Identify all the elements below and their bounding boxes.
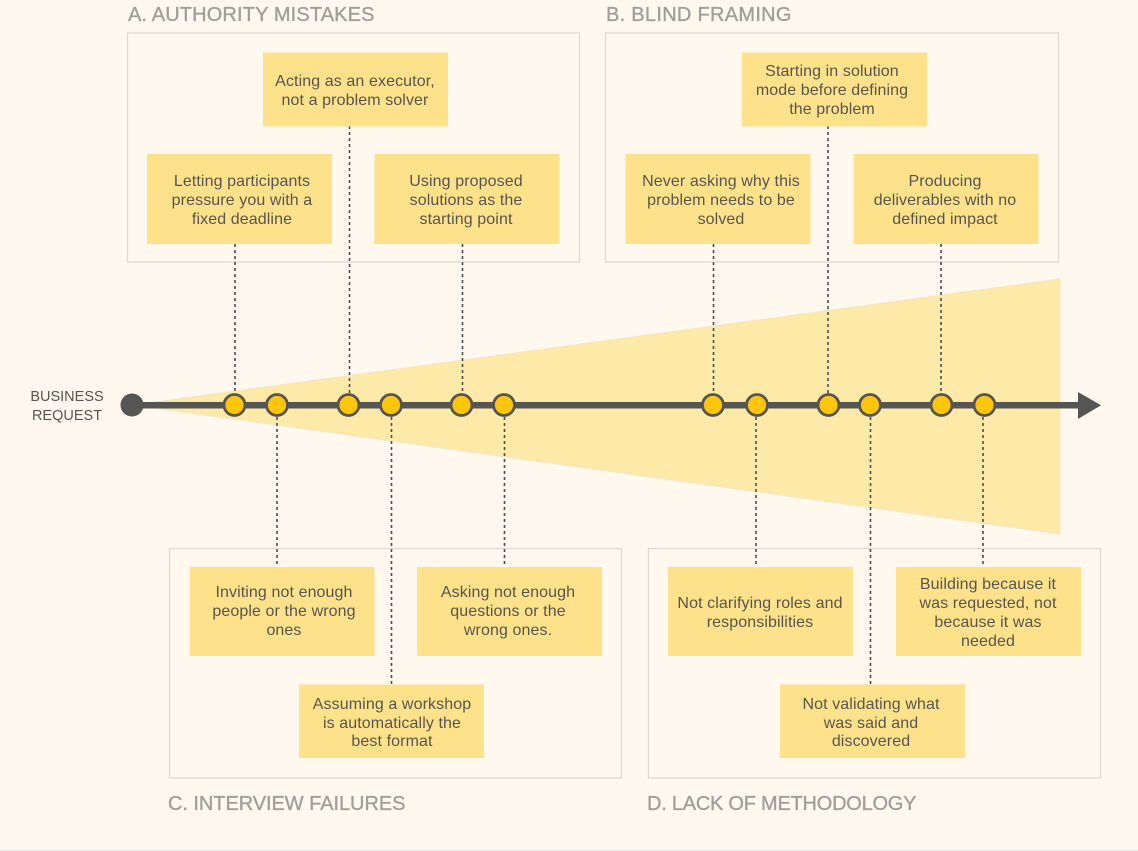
note: using proposed solutions: starting point (419, 211, 513, 228)
note: inviting not enough: people or the wrong (212, 603, 356, 620)
note: assuming a workshop: best format (351, 733, 433, 750)
note: not clarifying roles (668, 567, 853, 656)
heading: B: B. BLIND FRAMING (606, 4, 792, 26)
connectors (235, 126, 983, 685)
heading: D: D. LACK OF METHODOLOGY (647, 793, 917, 815)
note: asking not enough: Asking not enough (441, 584, 575, 601)
panel: authority mistakes (128, 33, 580, 262)
note: building because requested: needed (961, 633, 1015, 650)
note: letting participants: fixed deadline (192, 211, 292, 228)
note: not validating (780, 684, 965, 758)
panel: lack of methodology (648, 548, 1100, 778)
note: producing deliverables (854, 154, 1038, 244)
note: using proposed solutions: Using proposed (409, 173, 523, 190)
note: never asking why (626, 154, 810, 244)
note: never asking why: problem needs to be (647, 192, 795, 209)
note: building because requested (896, 567, 1081, 656)
timeline arrow (132, 392, 1101, 419)
note: building because requested: because it was (934, 614, 1042, 631)
panel: interview failures (170, 548, 622, 778)
note: producing deliverables: deliverables with no (874, 192, 1016, 209)
note: building because requested: was requested, not (918, 595, 1057, 612)
note: starting in solution mode: the problem (789, 101, 875, 118)
start node (120, 394, 144, 416)
note: producing deliverables: Producing (909, 173, 981, 190)
label: business request: BUSINESS (30, 389, 104, 405)
note: not clarifying roles: responsibilities (707, 614, 813, 631)
note: assuming a workshop: Assuming a workshop (313, 696, 471, 713)
note: acting as an executor: not a problem solver (282, 92, 429, 109)
note: not validating: Not validating what (802, 696, 940, 713)
note: using proposed solutions (374, 154, 560, 244)
note: starting in solution mode (742, 52, 927, 126)
note: never asking why: Never asking why this (642, 173, 800, 190)
note: starting in solution mode: mode before defining (756, 82, 908, 99)
note: producing deliverables: defined impact (892, 211, 998, 228)
note: not validating: was said and (823, 715, 918, 732)
label: business request: REQUEST (32, 408, 102, 424)
note: not clarifying roles: Not clarifying roles and (677, 595, 843, 612)
note: letting participants: pressure you with a (172, 192, 312, 209)
note: using proposed solutions: solutions as the (410, 192, 522, 209)
note: building because requested: Building because it (920, 576, 1057, 593)
note: acting as an executor (263, 52, 448, 126)
panel: blind framing (606, 33, 1058, 262)
widening cone (133, 279, 1060, 534)
heading: A: A. AUTHORITY MISTAKES (128, 4, 375, 26)
timeline nodes (224, 394, 995, 416)
note: asking not enough (417, 567, 602, 656)
heading: C: C. INTERVIEW FAILURES (168, 793, 406, 815)
note: inviting not enough: Inviting not enough (215, 584, 353, 601)
note: asking not enough: wrong ones. (463, 622, 552, 639)
note: inviting not enough (190, 567, 374, 656)
note: asking not enough: questions or the (450, 603, 566, 620)
note: not validating: discovered (832, 733, 910, 750)
note: letting participants: Letting participants (174, 173, 310, 190)
note: inviting not enough: ones (266, 622, 302, 639)
note: never asking why: solved (698, 211, 744, 228)
note: assuming a workshop (299, 684, 484, 758)
note: starting in solution mode: Starting in solution (765, 63, 899, 80)
note: letting participants (147, 154, 332, 244)
note: acting as an executor: Acting as an executor, (275, 73, 435, 90)
note: assuming a workshop: is automatically the (323, 715, 461, 732)
